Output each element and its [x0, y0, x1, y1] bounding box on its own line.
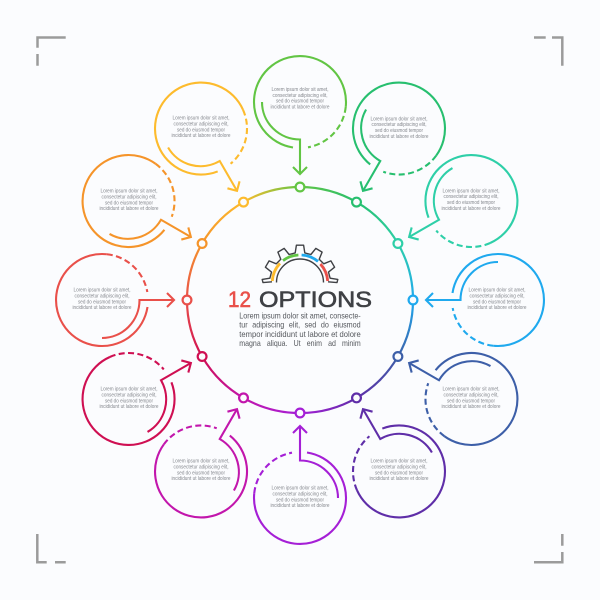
- text: sed do eiusmod tempor: [276, 497, 324, 503]
- text: incididunt ut labore et dolore: [172, 476, 231, 482]
- title: 12 OPTIONS: [228, 287, 372, 312]
- text: Lorem ipsum dolor sit amet,: [442, 387, 500, 393]
- option 5: navy callout: [386, 323, 534, 462]
- text: consectetur adipiscing elit,: [74, 294, 130, 300]
- outline and arrow: [66, 138, 214, 277]
- option 7: purple callout: [254, 426, 346, 544]
- outline and arrow: [138, 66, 277, 214]
- text: incididunt ut labore et dolore: [442, 404, 501, 410]
- outline and arrow: [323, 386, 462, 534]
- text: incididunt ut labore et dolore: [72, 305, 132, 311]
- text: [172, 116, 231, 139]
- text: sed do eiusmod tempor: [447, 200, 495, 206]
- outline and arrow: [254, 426, 346, 544]
- description paragraph: tur adipiscing elit, sed do eiusmod: [239, 320, 361, 330]
- option 10: red callout: [56, 254, 174, 346]
- text: consectetur adipiscing elit,: [174, 121, 228, 127]
- option 8: magenta callout: [138, 386, 277, 534]
- option 2: emerald callout: [323, 66, 462, 214]
- text: incididunt ut labore et dolore: [100, 206, 159, 212]
- option 11: orange callout: [66, 138, 214, 277]
- text: Lorem ipsum dolor sit amet,: [272, 486, 328, 492]
- option 3: teal callout: [386, 138, 534, 277]
- text: sed do eiusmod tempor: [375, 470, 423, 476]
- title: 12 OPTIONS: OPTIONS: [259, 287, 372, 312]
- text: [270, 87, 330, 110]
- outline and arrow: [386, 323, 534, 462]
- text: Lorem ipsum dolor sit amet,: [172, 116, 230, 122]
- text: incididunt ut labore et dolore: [442, 206, 501, 212]
- text: sed do eiusmod tempor: [177, 127, 225, 133]
- text: consectetur adipiscing elit,: [174, 465, 228, 471]
- text: incididunt ut labore et dolore: [270, 104, 330, 110]
- outline and arrow: [56, 254, 174, 346]
- text: [100, 189, 159, 212]
- text: sed do eiusmod tempor: [105, 398, 153, 404]
- option 4: blue callout: [426, 254, 544, 346]
- text: incididunt ut labore et dolore: [468, 305, 527, 311]
- text: incididunt ut labore et dolore: [370, 476, 429, 482]
- corner frame marks: [37, 38, 562, 562]
- option 1: green callout: [254, 56, 346, 174]
- text: Lorem ipsum dolor sit amet,: [272, 87, 328, 93]
- text: Lorem ipsum dolor sit amet,: [74, 288, 130, 294]
- text: consectetur adipiscing elit,: [272, 492, 328, 498]
- outline and arrow: [426, 254, 544, 346]
- text: [72, 288, 132, 311]
- option 6: violet callout: [323, 386, 462, 534]
- text: incididunt ut labore et dolore: [270, 503, 330, 509]
- text: Lorem ipsum dolor sit amet,: [468, 288, 526, 294]
- text: sed do eiusmod tempor: [105, 200, 153, 206]
- text: consectetur adipiscing elit,: [372, 465, 426, 471]
- text: Lorem ipsum dolor sit amet,: [442, 188, 500, 194]
- text: sed do eiusmod tempor: [276, 99, 324, 105]
- text: consectetur adipiscing elit,: [272, 93, 328, 99]
- text: [468, 288, 527, 311]
- text: sed do eiusmod tempor: [447, 398, 495, 404]
- text: Lorem ipsum dolor sit amet,: [370, 459, 428, 465]
- text: [270, 486, 330, 509]
- text: consectetur adipiscing elit,: [102, 393, 156, 399]
- option 9: crimson callout: [66, 323, 214, 462]
- outline and arrow: [66, 323, 214, 462]
- text: [172, 459, 231, 482]
- text: consectetur adipiscing elit,: [470, 294, 524, 300]
- text: consectetur adipiscing elit,: [444, 393, 498, 399]
- icon: half gear with coloured arcs: [262, 245, 338, 283]
- text: incididunt ut labore et dolore: [370, 134, 429, 140]
- text: Lorem ipsum dolor sit amet,: [100, 387, 158, 393]
- description paragraph: tempor incididunt ut labore et dolore: [239, 329, 361, 339]
- text: consectetur adipiscing elit,: [102, 194, 156, 200]
- text: [442, 387, 501, 410]
- text: [370, 116, 429, 140]
- text: Lorem ipsum dolor sit amet,: [370, 116, 428, 122]
- outline and arrow: [323, 66, 462, 214]
- description paragraph: magna aliqua. Ut enim ad minim: [239, 338, 361, 348]
- option 12: yellow callout: [138, 66, 277, 214]
- title: 12 OPTIONS: 12: [228, 287, 251, 312]
- central ring with nodes: [183, 183, 417, 417]
- text: Lorem ipsum dolor sit amet,: [172, 459, 230, 465]
- text: sed do eiusmod tempor: [473, 299, 521, 305]
- text: incididunt ut labore et dolore: [100, 404, 159, 410]
- description paragraph: [239, 310, 361, 348]
- text: sed do eiusmod tempor: [375, 128, 423, 134]
- text: consectetur adipiscing elit,: [372, 122, 426, 128]
- text: sed do eiusmod tempor: [177, 470, 225, 476]
- outline and arrow: [138, 386, 277, 534]
- description paragraph: Lorem ipsum dolor sit amet, consecte-: [239, 310, 361, 320]
- outline and arrow: [386, 138, 534, 277]
- text: incididunt ut labore et dolore: [172, 133, 231, 139]
- text: [370, 459, 429, 482]
- text: [100, 387, 159, 410]
- text: sed do eiusmod tempor: [78, 299, 126, 305]
- text: consectetur adipiscing elit,: [444, 194, 498, 200]
- outline and arrow: [254, 56, 346, 174]
- text: [442, 188, 501, 212]
- text: Lorem ipsum dolor sit amet,: [100, 189, 158, 195]
